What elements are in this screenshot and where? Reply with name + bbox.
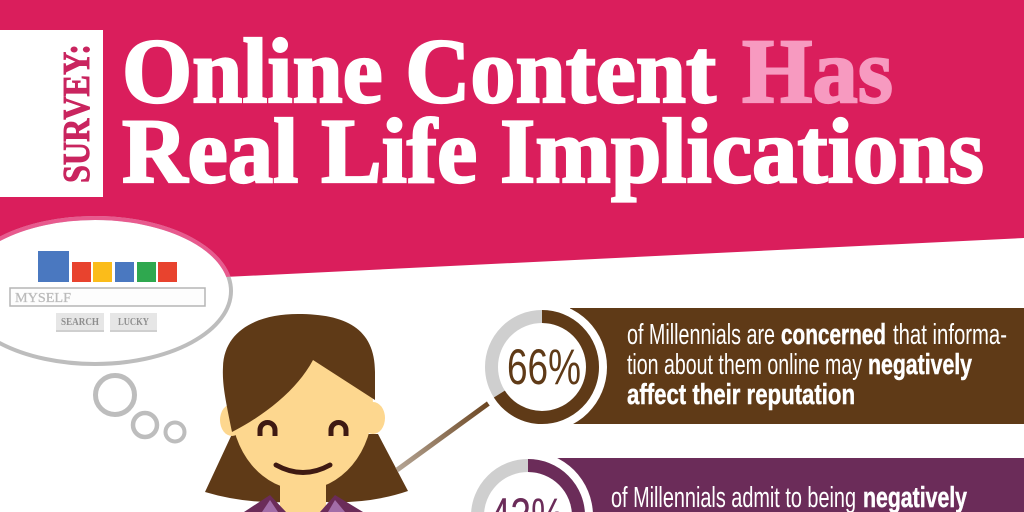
search input (10, 288, 205, 306)
statement text: negatively (868, 349, 972, 381)
statement text: tion about them online may (627, 349, 862, 381)
smile (276, 465, 330, 472)
pointer line (397, 403, 489, 470)
collar (244, 495, 363, 512)
lucky button (110, 313, 157, 332)
title: Has (742, 20, 893, 122)
panel: 43% stat (471, 458, 1024, 512)
survey label box (0, 30, 103, 197)
ring (477, 302, 607, 432)
statement text (627, 319, 1007, 411)
eyes (260, 423, 346, 436)
thought bubble with search page (0, 218, 231, 364)
header banner (0, 0, 1024, 288)
back hair (205, 434, 408, 502)
lucky button: LUCKY (118, 317, 150, 328)
survey label box: SURVEY: (56, 44, 98, 183)
front hair (223, 314, 375, 432)
icon: search logo blocks (38, 251, 177, 282)
ears (220, 402, 385, 436)
ring (471, 458, 593, 512)
statement text: concerned (781, 319, 886, 351)
search input: MYSELF (15, 291, 71, 306)
statement text: of Millennials are (627, 319, 775, 351)
panel: 66% stat (477, 302, 1024, 432)
brown bar (570, 308, 1024, 424)
percentage: 66% (507, 339, 581, 395)
face (236, 360, 373, 486)
title: Real Life Implications (122, 100, 984, 202)
search button: SEARCH (61, 317, 99, 328)
thought bubble trail (96, 376, 184, 442)
title (122, 20, 984, 202)
neck (280, 484, 326, 512)
search button (56, 313, 104, 332)
character (205, 314, 408, 512)
purple bar (555, 458, 1024, 512)
title: Online Content (122, 20, 716, 122)
statement text: affect their reputation (627, 379, 855, 411)
